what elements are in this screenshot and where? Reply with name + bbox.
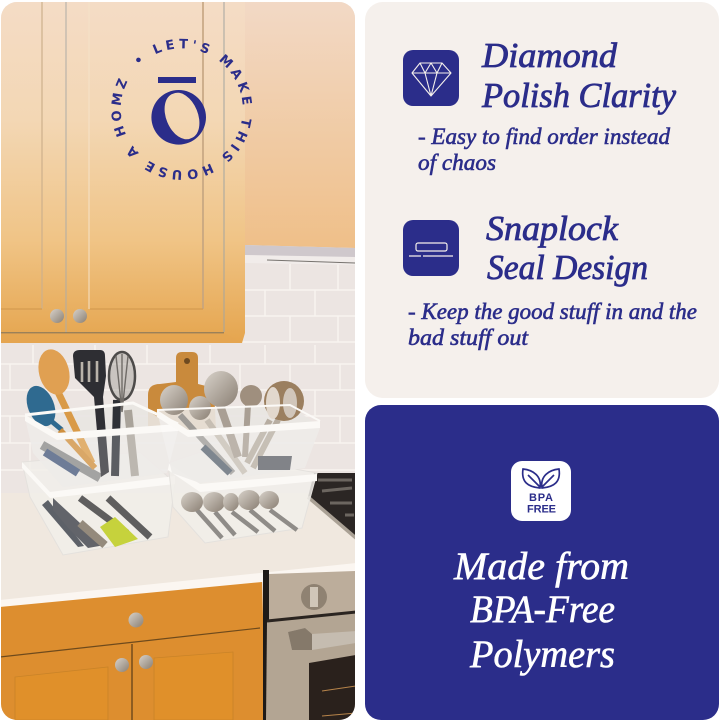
utensils: right bin <box>160 371 304 473</box>
heading: made from BPA-free polymers: Made from <box>453 545 629 588</box>
text: snaplock description <box>408 299 697 350</box>
heading: snaplock seal design: Seal Design <box>487 248 648 287</box>
top right bin back <box>158 408 314 482</box>
icon: diamond <box>403 50 459 106</box>
upper wall <box>245 0 356 250</box>
circular slogan: • LET'S MAKE THIS HOUSE A HOMZ <box>111 38 252 180</box>
panel: features <box>365 2 719 398</box>
range hood shelf <box>247 245 353 248</box>
heading: made from BPA-free polymers: BPA-Free <box>470 588 615 631</box>
heading: snaplock seal design: Snaplock <box>486 209 620 248</box>
storage bin: top left <box>25 403 178 487</box>
text: snaplock description: - Keep the good stuff in and the <box>408 299 697 324</box>
logo badge <box>111 38 252 180</box>
heading: diamond polish clarity: Diamond <box>481 36 618 75</box>
stove <box>308 473 356 538</box>
upper cabinet <box>0 0 245 343</box>
lower left bin <box>22 452 175 555</box>
icon: snaplock seal <box>403 220 459 276</box>
lower right bin <box>168 464 318 544</box>
heading: snaplock seal design <box>486 209 648 287</box>
heading: made from BPA-free polymers <box>453 545 629 676</box>
text: snaplock description: bad stuff out <box>408 325 529 350</box>
text: diamond description <box>418 124 671 175</box>
heading: diamond polish clarity: Polish Clarity <box>481 76 676 115</box>
lower cabinet <box>0 582 266 720</box>
heading: made from BPA-free polymers: Polymers <box>469 633 615 676</box>
logo mark <box>151 77 206 145</box>
text: diamond description: of chaos <box>418 150 496 175</box>
icon: BPA free badge: FREE <box>527 504 556 516</box>
storage bin: top right <box>157 405 320 483</box>
icon: BPA free badge: BPA <box>529 492 553 504</box>
heading: diamond polish clarity <box>481 36 676 115</box>
counter top <box>0 493 356 607</box>
panel: BPA free <box>365 405 719 720</box>
icon: BPA free badge <box>511 461 571 521</box>
tiled backsplash <box>0 264 356 470</box>
cutting board <box>148 352 216 430</box>
top left bin back <box>28 412 169 470</box>
panel: kitchen photo <box>1 2 355 720</box>
oven <box>263 570 356 720</box>
text: diamond description: - Easy to find order instead <box>418 124 671 149</box>
utensils: left bin <box>21 346 135 478</box>
